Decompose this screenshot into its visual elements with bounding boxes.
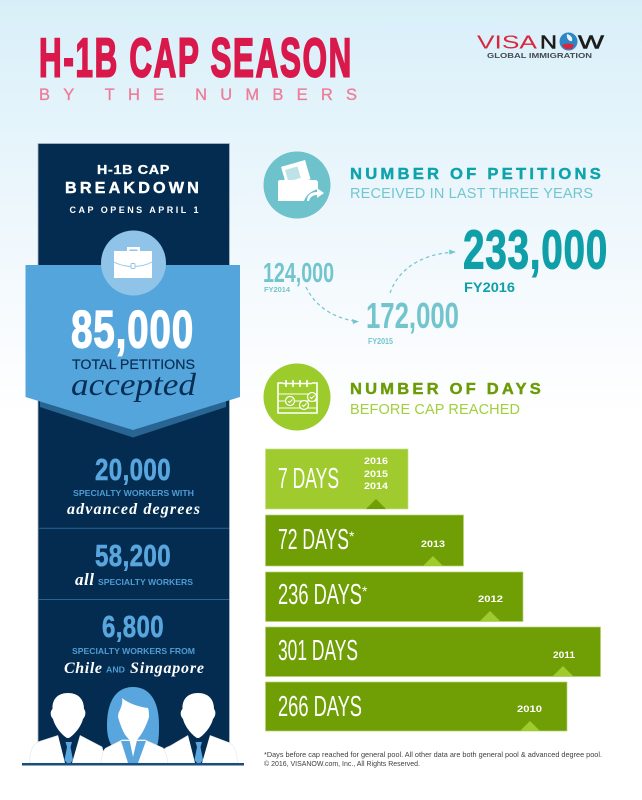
bar: 7 days: [266, 449, 408, 509]
bar: 266 days: 2010: [517, 704, 542, 715]
chart: petitions received: FY2014: [264, 285, 291, 294]
stat: 6,800: 6,800: [102, 609, 164, 644]
subheading: before cap reached: BEFORE CAP REACHED: [350, 402, 520, 418]
bar: 266 days: [266, 682, 567, 731]
logo: VisaNow: [477, 32, 605, 60]
banner: total petitions: [26, 265, 240, 430]
footnote: [264, 750, 602, 768]
label: total petitions: TOTAL PETITIONS: [72, 357, 195, 372]
bar: 7 days: 2014: [364, 481, 389, 492]
chart: petitions received: FY2016: [464, 280, 516, 295]
bar: 72 days: [266, 515, 464, 566]
bar: 236 days: *: [362, 583, 368, 599]
bar: 301 days: 2011: [553, 650, 576, 661]
chart: petitions received: FY2015: [368, 337, 393, 346]
chart: petitions received: [263, 218, 608, 346]
stat: 58,200: SPECIALTY WORKERS: [98, 577, 193, 587]
bar: 72 days: 72 DAYS: [278, 524, 349, 556]
bar: 7 days: 2015: [364, 469, 389, 480]
title: H-1B CAP SEASON: [39, 26, 353, 88]
stat: 6,800: Singapore: [130, 660, 204, 677]
footnote: *Days before cap reached for general pool. All other data are both general pool & advanced degree pool.: [264, 750, 602, 759]
subtitle: BY THE NUMBERS: [39, 86, 357, 104]
man left: [30, 693, 106, 763]
stat: 20,000: 20,000: [95, 452, 171, 487]
label: accepted: accepted: [71, 366, 197, 402]
woman: [101, 687, 168, 763]
chart: petitions received: 124,000: [263, 257, 334, 288]
stat: 85,000: 85,000: [71, 300, 194, 360]
stat: 20,000: advanced degrees: [67, 501, 200, 518]
icon: wallet with papers: [264, 152, 330, 218]
heading: number of petitions: NUMBER OF PETITIONS: [350, 166, 604, 183]
stat: 6,800: SPECIALTY WORKERS FROM: [72, 646, 195, 656]
panel heading: CAP OPENS APRIL 1: [70, 205, 198, 215]
icon: people: [22, 687, 244, 766]
title: [39, 26, 357, 104]
logo: VisaNow: VISA: [477, 32, 538, 52]
stat: 6,800: Chile: [64, 660, 102, 677]
footnote: © 2016, VISANOW.com, Inc., All Rights Reserved.: [264, 759, 420, 768]
heading: number of days: NUMBER OF DAYS: [350, 381, 544, 398]
logo: VisaNow: W: [578, 32, 605, 52]
bar: 301 days: [266, 627, 600, 676]
bar: 236 days: 2012: [478, 594, 503, 605]
bar: 7 days: 2016: [364, 456, 388, 467]
logo: VisaNow: N: [540, 32, 557, 52]
bar: 7 days: 7 DAYS: [278, 463, 339, 495]
icon: calendar: [264, 364, 330, 430]
stat: 58,200: all: [75, 570, 94, 589]
stat: 58,200: [75, 538, 193, 589]
logo: VisaNow: GLOBAL IMMIGRATION: [487, 51, 592, 60]
stat: 6,800: AND: [106, 664, 125, 674]
bar: 72 days: *: [349, 528, 355, 544]
bar: 236 days: 236 DAYS: [278, 579, 362, 611]
stat: 58,200: 58,200: [95, 538, 171, 573]
stat: 6,800: [64, 609, 204, 677]
stat: 20,000: [67, 452, 200, 518]
bar: 301 days: 301 DAYS: [278, 635, 358, 667]
man right: [160, 693, 238, 763]
arrow: 2015 to 2016: [390, 250, 456, 293]
heading: number of days: [350, 381, 544, 418]
subheading: received: RECEIVED IN LAST THREE YEARS: [350, 186, 593, 202]
panel: cap breakdown: [22, 144, 244, 766]
banner shadow: [40, 401, 226, 438]
icon: briefcase: [101, 230, 166, 296]
bar: 72 days: 2013: [421, 539, 445, 550]
bar: 266 days: 266 DAYS: [278, 691, 362, 723]
chart: petitions received: 172,000: [366, 295, 459, 336]
heading: number of petitions: [350, 166, 604, 202]
bar: 236 days: [266, 572, 523, 622]
panel heading: [65, 162, 202, 215]
panel heading: BREAKDOWN: [65, 180, 202, 197]
arrow: 2014 to 2015: [306, 287, 359, 324]
panel heading: H-1B CAP: [97, 162, 170, 177]
stat: 20,000: SPECIALTY WORKERS WITH: [73, 488, 194, 498]
